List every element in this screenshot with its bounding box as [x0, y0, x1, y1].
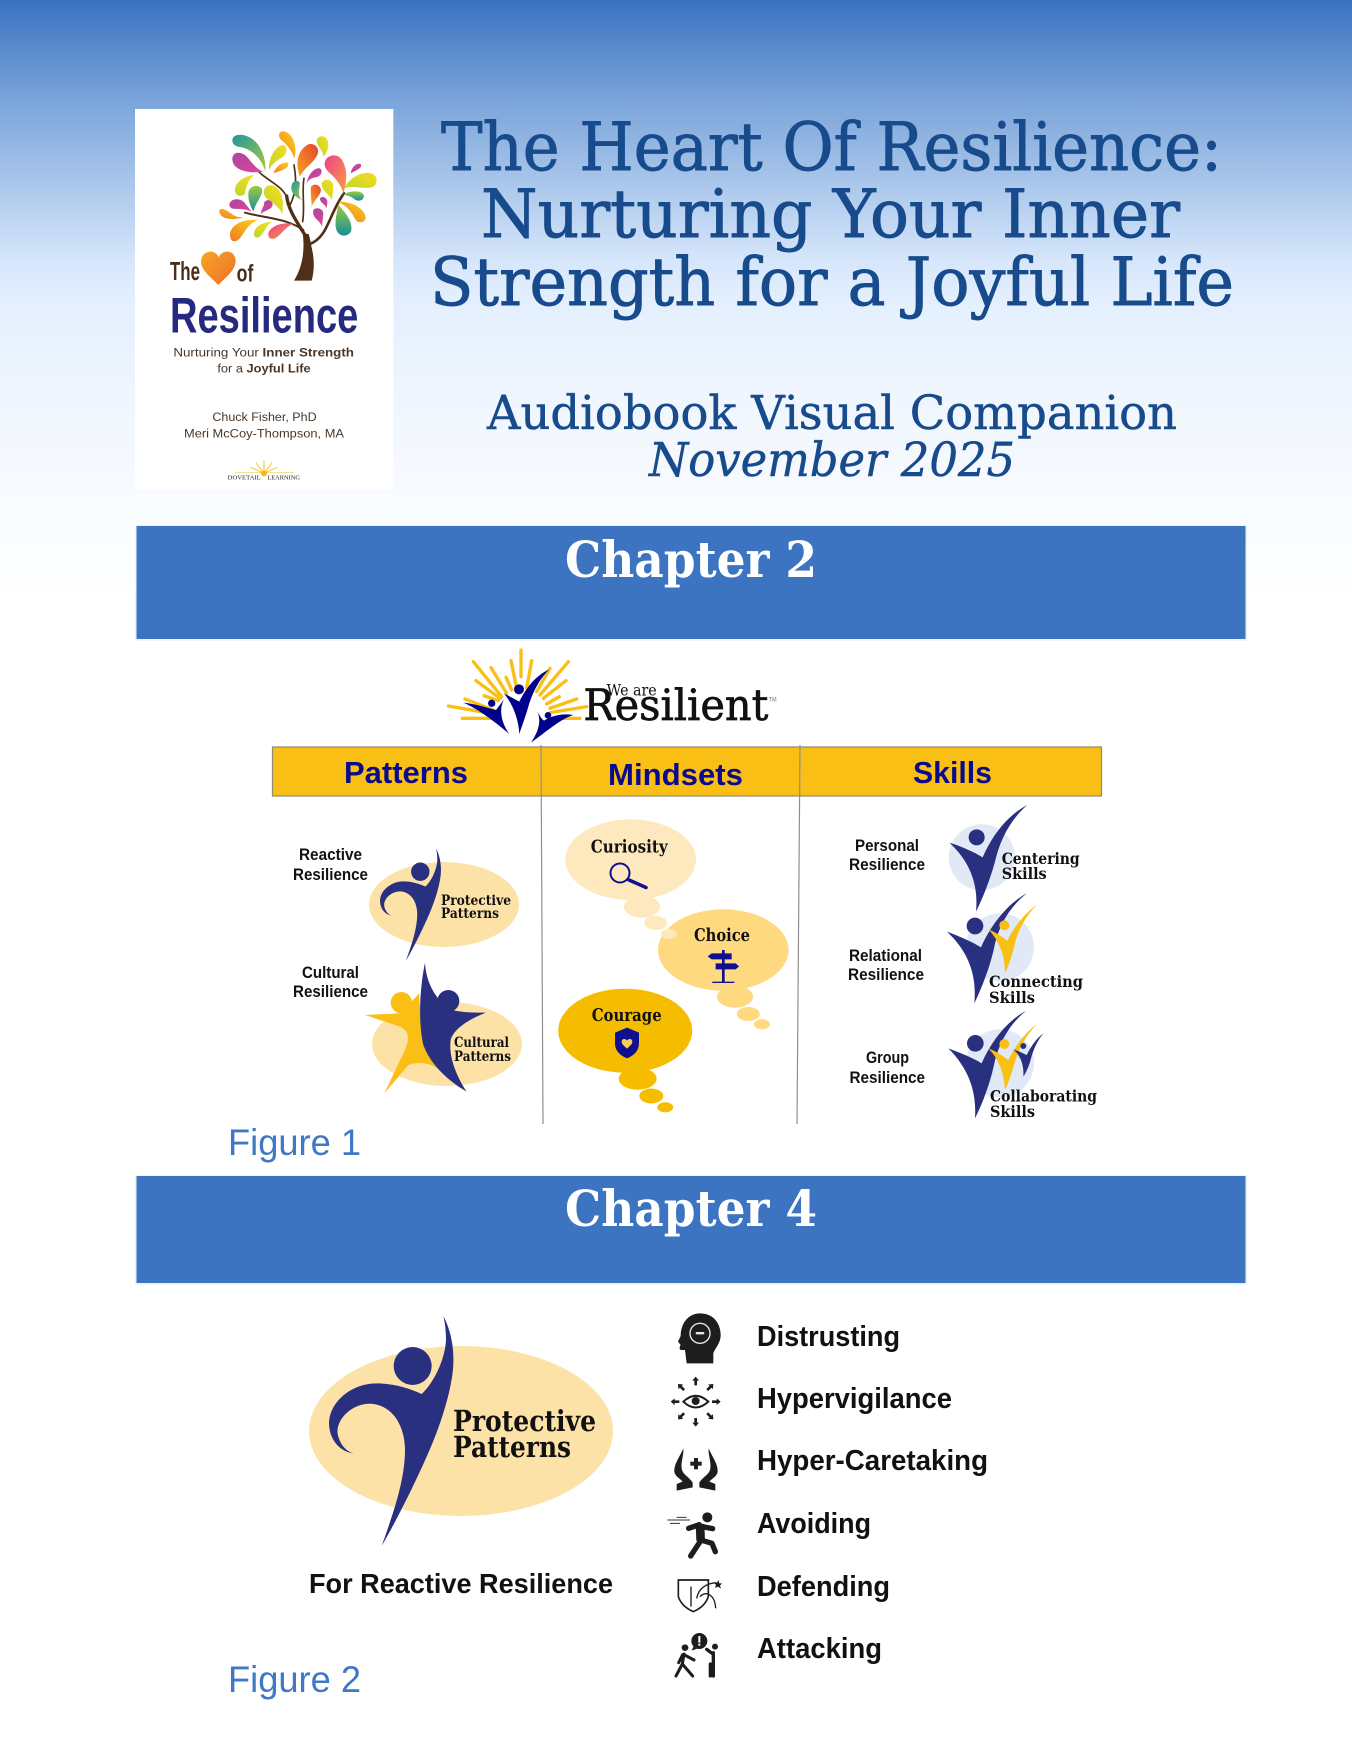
cover title: Resilience	[170, 288, 358, 344]
label: group resilience: Group	[866, 1049, 909, 1067]
label: group resilience	[850, 1049, 925, 1087]
column dividers	[541, 745, 800, 1124]
book cover	[135, 109, 393, 489]
column: mindsets	[558, 819, 789, 1112]
cover subtitle: Nurturing Your Inner Strength	[173, 346, 354, 360]
publisher logo	[228, 460, 300, 481]
column: skills	[848, 805, 1097, 1121]
label: distrusting: Distrusting	[757, 1321, 900, 1353]
label: personal resilience	[849, 837, 925, 874]
panel: figure 1 background	[135, 640, 1247, 1176]
icon: colourful tree	[219, 131, 377, 281]
label: hypervigilance: Hypervigilance	[757, 1383, 952, 1415]
icon: magnifying glass	[610, 864, 646, 888]
title: Strength for a Joyful Life	[430, 244, 1234, 321]
collaborating skills emblem: Collaborating	[990, 1087, 1097, 1106]
book cover: Meri McCoy-Thompson, MA	[184, 426, 344, 440]
cultural patterns emblem: Cultural	[454, 1035, 509, 1051]
title: The Heart Of Resilience:	[441, 109, 1222, 186]
label: reactive resilience: Reactive	[299, 846, 362, 864]
centering skills emblem	[949, 805, 1080, 912]
label: relational resilience: Resilience	[848, 966, 924, 984]
label: group resilience: Resilience	[850, 1069, 925, 1087]
chapter 2 banner: Chapter 2	[565, 530, 817, 589]
label: personal resilience: Resilience	[849, 856, 925, 874]
connecting skills emblem: Skills	[989, 988, 1035, 1007]
thought bubble: curiosity: Curiosity	[591, 837, 668, 858]
table header: Patterns, Mindsets, Skills: Patterns	[344, 755, 468, 790]
icon: shield with heart	[615, 1028, 639, 1058]
label: reactive resilience	[293, 846, 368, 884]
cultural patterns emblem: Patterns	[454, 1049, 511, 1065]
label: reactive resilience: Resilience	[293, 866, 368, 884]
protective patterns emblem: Protective	[441, 893, 511, 909]
cover title	[170, 252, 358, 344]
label: cultural resilience	[293, 964, 368, 1001]
protective patterns large emblem: Protective	[453, 1404, 596, 1438]
protective patterns large emblem: Patterns	[453, 1430, 571, 1464]
cover authors: Chuck Fisher, PhD	[212, 410, 317, 424]
collaborating skills emblem	[948, 1011, 1097, 1121]
collaborating skills emblem: Skills	[990, 1102, 1035, 1121]
cover title: The	[170, 256, 200, 286]
publisher logo: DOVETAIL	[228, 474, 261, 481]
protective patterns large emblem	[309, 1316, 613, 1546]
cultural patterns emblem	[365, 963, 522, 1093]
thought bubble: choice: Choice	[694, 925, 750, 946]
subtitle: Audiobook Visual Companion	[486, 386, 1177, 441]
subtitle	[486, 386, 1177, 488]
label: cultural resilience: Resilience	[293, 983, 368, 1001]
chapter 2 banner	[135, 525, 1247, 641]
chapter 4 banner	[135, 1175, 1247, 1285]
chapter 4 banner: Chapter 4	[565, 1179, 817, 1238]
logo figures	[463, 669, 573, 743]
icon: defending shield	[678, 1580, 722, 1612]
centering skills emblem: Centering	[1002, 849, 1080, 868]
We are Resilient logo	[448, 650, 777, 743]
label: avoiding: Avoiding	[757, 1508, 871, 1540]
centering skills emblem: Skills	[1002, 864, 1047, 883]
label: personal resilience: Personal	[855, 837, 919, 855]
book cover: for a Joyful Life	[217, 362, 311, 376]
label: relational resilience: Relational	[849, 947, 922, 965]
thought bubble: courage: Courage	[592, 1005, 662, 1026]
title: Nurturing Your Inner	[481, 176, 1180, 253]
figure 1 caption: Figure 1	[228, 1122, 361, 1163]
thought bubble: curiosity	[565, 819, 696, 939]
icon: signpost	[708, 950, 739, 983]
title	[430, 109, 1234, 321]
protective patterns emblem: Patterns	[441, 906, 499, 922]
label: cultural resilience: Cultural	[302, 964, 359, 982]
label: relational resilience	[848, 947, 924, 984]
thought bubble: courage	[558, 989, 692, 1112]
caption: for reactive resilience: For Reactive Resilience	[309, 1568, 613, 1599]
connecting skills emblem	[947, 893, 1083, 1007]
logo wordmark: We are	[607, 680, 657, 699]
label: hyper-caretaking: Hyper-Caretaking	[757, 1445, 988, 1477]
label: attacking: Attacking	[757, 1633, 882, 1665]
label: defending: Defending	[757, 1571, 890, 1603]
column: patterns	[293, 846, 522, 1093]
subtitle: November 2025	[648, 433, 1015, 488]
table header: Patterns, Mindsets, Skills	[272, 747, 1102, 796]
logo sun rays	[448, 650, 587, 718]
cover title: of	[237, 261, 254, 288]
connecting skills emblem: Connecting	[989, 972, 1083, 991]
protective patterns emblem	[369, 848, 519, 961]
icon: attacking figures	[676, 1633, 718, 1676]
protective patterns list	[667, 1313, 988, 1676]
table header: Patterns, Mindsets, Skills: Mindsets	[608, 757, 743, 792]
icon: hyper-caretaking hands	[674, 1448, 718, 1491]
table header: Patterns, Mindsets, Skills: Skills	[913, 755, 992, 790]
publisher logo: LEARNING	[267, 474, 300, 481]
icon: distrusting head	[678, 1313, 721, 1363]
figure 2 caption: Figure 2	[228, 1659, 361, 1700]
thought bubble: choice	[658, 909, 789, 1029]
icon: hypervigilance eye	[671, 1377, 721, 1427]
logo wordmark: Resilient	[583, 681, 768, 731]
logo wordmark: TM	[769, 697, 777, 703]
icon: avoiding runner	[667, 1512, 715, 1556]
